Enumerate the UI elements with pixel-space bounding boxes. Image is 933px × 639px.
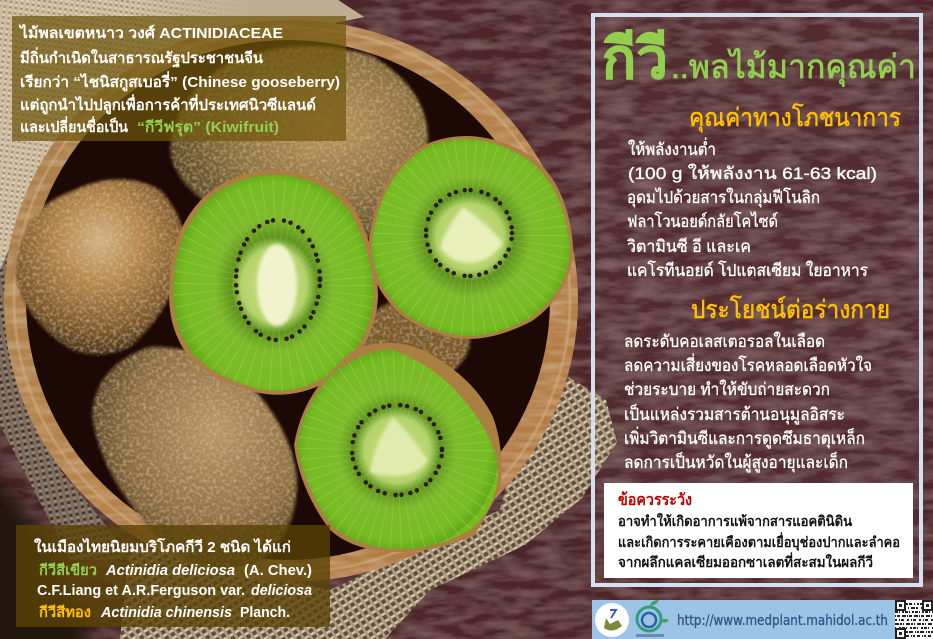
cut kiwi: bottom (290, 343, 505, 555)
footer background (592, 600, 896, 639)
text: nutrition list: ฟลาโวนอยด์กลัยโคไซด์ (627, 211, 778, 231)
text: benefits list: ลดการเป็นหวัดในผู้สูงอายุและเด็ก (624, 451, 848, 473)
callout text (618, 512, 900, 570)
icon: herb garden logo (636, 600, 669, 637)
text: nutrition list: อุดมไปด้วยสารในกลุ่มฟีโนลิก (627, 187, 820, 208)
text: origin lines: “กีวีฟรุต” (Kiwifruit) (137, 119, 279, 137)
panel: top-left origin note (12, 16, 346, 141)
cut kiwi: left (169, 170, 378, 400)
text: nutrition list: ให้พลังงานต่ำ (628, 137, 716, 159)
rays (217, 225, 337, 345)
text: varieties intro: ในเมืองไทยนิยมบริโภคกีวี 2 ชนิด ได้แก่ (34, 537, 291, 556)
background: burlap blurred tone (0, 0, 364, 270)
rays (409, 175, 529, 295)
text: origin lines: เรียกว่า “ไชนิสกูสเบอรี่” (Chinese gooseberry) (20, 71, 340, 92)
text: nutrition list: แคโรทีนอยด์ โปแตสเซียม ใยอาหาร (627, 260, 868, 280)
bowl rim highlight (14, 28, 570, 572)
text: green kiwi authority: deliciosa (251, 583, 312, 599)
skin (369, 136, 573, 339)
text: origin lines: ไม้พลเขตหนาว วงศ์ ACTINIDIACEAE (18, 23, 283, 42)
footer bar (592, 600, 896, 639)
text: nutrition list (627, 137, 877, 280)
panel: kiwi varieties in Thailand (16, 525, 330, 627)
flesh (297, 350, 498, 549)
skin (169, 170, 378, 395)
callout heading: ข้อควรระวัง (618, 491, 692, 509)
text: nutrition list: (100 g ให้พลังงาน 61-63 kcal) (628, 163, 877, 183)
callout text: และเกิดการระคายเคืองตามเยื่อบุช่องปากและลำคอ (618, 532, 900, 551)
flesh (172, 170, 376, 400)
text: nutrition list: วิตามินซี อี และเค (627, 237, 751, 256)
text: website url: http://www.medplant.mahidol.ac.th (677, 613, 888, 629)
whole kiwi: behind center (360, 298, 470, 382)
rays (337, 390, 457, 510)
callout: cautions (604, 483, 913, 578)
wooden bowl (4, 20, 578, 582)
text: origin lines: และเปลี่ยนชื่อเป็น (20, 116, 129, 136)
seeds (352, 405, 442, 495)
title (602, 27, 916, 90)
text: origin lines: แต่ถูกนำไปปลูกเพื่อการค้าที่ประเทศนิวซีแลนด์ (20, 94, 316, 115)
text: golden kiwi (39, 604, 290, 621)
whole kiwi: top (170, 46, 428, 240)
title: กีวี (602, 27, 668, 90)
bowl outer rim (4, 20, 578, 582)
background: burlap right and bottom of the bowl (120, 360, 617, 639)
frame border (593, 15, 921, 585)
text: benefits list: ช่วยระบาย ทำให้ขับถ่ายสะดวก (624, 379, 830, 399)
icon: QR code (895, 600, 933, 639)
text: benefits list (624, 331, 872, 473)
text: benefits list: เพิ่มวิตามินซีและการดูดซึมธาตุเหล็ก (624, 426, 865, 449)
background: dark corner bottom-left (0, 440, 100, 639)
text: golden kiwi: Planch. (240, 605, 290, 621)
text: benefits list: ลดความเสี่ยงของโรคหลอดเลือดหัวใจ (624, 353, 872, 375)
text: green kiwi: (A. Chev.) (244, 563, 312, 579)
text: origin lines: มีถิ่นกำเนิดในสาธารณรัฐประชาชนจีน (20, 47, 264, 68)
background: burlap left side (0, 180, 130, 560)
icon: institution logo (595, 603, 629, 637)
callout background (604, 483, 913, 578)
bowl inner shadow (26, 40, 550, 560)
text: green kiwi: Actinidia deliciosa (105, 563, 235, 579)
skin (294, 343, 501, 552)
cut kiwi: right (365, 133, 575, 341)
panel background (16, 525, 330, 627)
callout text: จากผลึกแคลเซียมออกซาเลตที่สะสมในผลกีวี (618, 552, 873, 570)
text: origin lines (18, 23, 340, 137)
panel background (12, 16, 346, 141)
seeds (236, 220, 320, 340)
text: green kiwi (39, 562, 312, 579)
core (440, 207, 503, 263)
flesh (372, 139, 570, 336)
text: green kiwi: กีวีสีเขียว (39, 562, 97, 579)
whole kiwi: left (15, 179, 184, 355)
panel: information frame (593, 15, 921, 585)
text: benefits list: ลดระดับคอเลสเตอรอลในเลือด (624, 331, 825, 351)
callout text: อาจทำให้เกิดอาการแพ้จากสารแอคตินิดิน (618, 512, 852, 529)
text: benefits list: เป็นแหล่งรวมสารต้านอนุมูลอิสระ (624, 403, 845, 425)
text: green kiwi authority: C.F.Liang et A.R.Ferguson var. (37, 583, 245, 599)
heading: benefits: ประโยชน์ต่อร่างกาย (691, 295, 890, 324)
core (257, 244, 297, 326)
text: golden kiwi: กีวีสีทอง (39, 604, 91, 621)
heading: nutrition: คุณค่าทางโภชนาการ (689, 103, 901, 133)
whole kiwi: bottom left (92, 347, 297, 568)
text: golden kiwi: Actinidia chinensis (100, 605, 232, 621)
core (370, 417, 428, 476)
background: burlap top-left (0, 0, 364, 270)
seeds (426, 190, 512, 276)
title: ..พลไม้มากคุณค่า (671, 48, 916, 87)
